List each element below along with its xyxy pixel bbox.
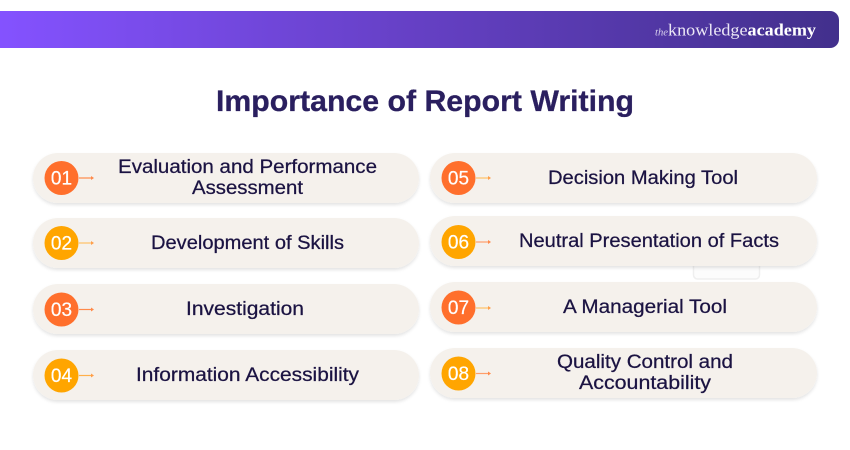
item 02 [33, 218, 419, 268]
item 02: Development of Skills [151, 233, 344, 254]
item 05 [430, 153, 817, 203]
item 07 [430, 282, 817, 332]
item 02: 02 [51, 234, 72, 254]
faint background box behind cards [694, 255, 760, 279]
item 03: 03 [51, 300, 72, 321]
item 08 [430, 348, 817, 398]
item 06: Neutral Presentation of Facts [519, 231, 779, 252]
item 05: 05 [448, 168, 469, 190]
title: Importance of Report Writing [216, 85, 634, 118]
item 08: 08 [448, 364, 469, 385]
logo: the knowledge academy: theknowledge academy [655, 20, 817, 40]
item 01: Evaluation and Performance [118, 157, 377, 178]
item 04: Information Accessibility [136, 365, 360, 386]
item 05: Decision Making Tool [548, 168, 738, 189]
item 04 [33, 350, 419, 400]
item 06 [430, 216, 817, 266]
item 03 [33, 284, 419, 334]
item 01: 01 [51, 168, 72, 190]
header bar [0, 11, 839, 48]
item 03: Investigation [186, 299, 304, 320]
item 04: 04 [51, 366, 72, 387]
item 07: 07 [448, 298, 469, 319]
item 01 [33, 153, 419, 203]
item 07: A Managerial Tool [563, 297, 727, 318]
item 08: Accountability [579, 373, 712, 394]
item 06: 06 [448, 232, 469, 254]
item 08: Quality Control and [557, 352, 733, 373]
item 01: Assessment [192, 178, 304, 199]
